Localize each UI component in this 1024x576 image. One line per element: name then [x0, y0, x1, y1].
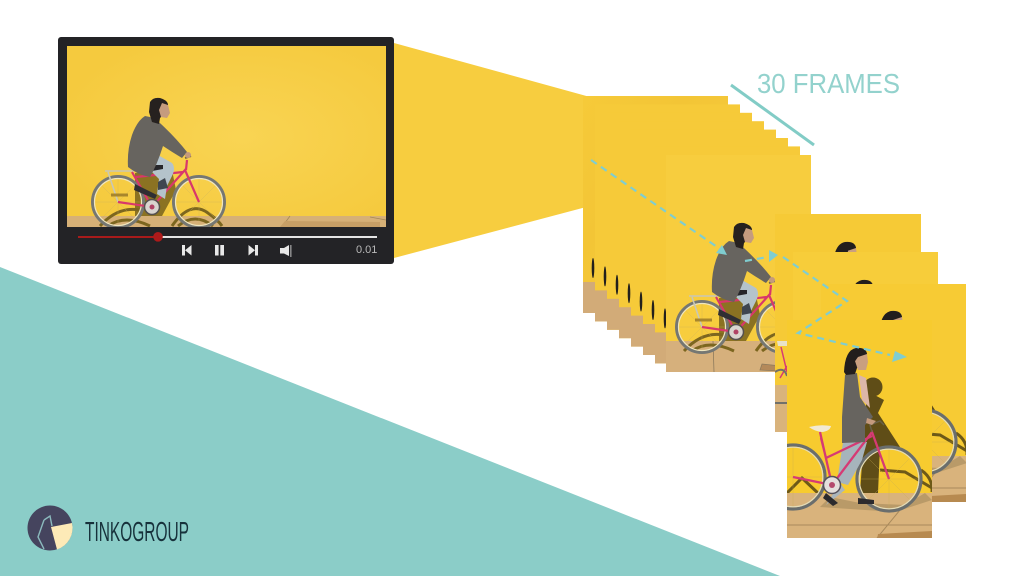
extracted frame C: [850, 284, 966, 502]
arrow to frame stack: [745, 250, 778, 262]
video player: [58, 37, 394, 264]
frame 7: [655, 146, 800, 363]
icon: next: [248, 245, 258, 256]
final arrowhead: [892, 351, 907, 362]
extracted frame B: [833, 252, 938, 284]
label: 30 frames: [731, 68, 900, 145]
zigzag dashed path: [783, 257, 890, 355]
frame 6: [643, 138, 788, 355]
frame 8: front frame with cyclist: [666, 155, 811, 372]
frame 4: [619, 121, 764, 338]
stack of 30 frames: [583, 96, 811, 372]
extracted frame D: front, woman walking bike: [787, 320, 932, 538]
background teal triangle: [0, 267, 780, 576]
icon: pause: [215, 245, 224, 256]
logo wordmark: TINKOGROUP: [85, 516, 189, 547]
playback controls: [182, 245, 291, 257]
player body: [58, 37, 394, 264]
icon: previous: [182, 245, 192, 256]
extracted frame A: [775, 214, 921, 432]
frame 5: [631, 130, 776, 347]
time label: 0.01: [356, 244, 377, 256]
funnel projection from player to frames: [394, 43, 590, 258]
frame 2: [595, 104, 740, 321]
frame 3: [607, 113, 752, 330]
icon: volume: [280, 245, 291, 257]
30 frames bracket line: [731, 85, 814, 145]
logo: Tinkogroup: [28, 506, 189, 550]
video frame: cyclist on yellow wall: [67, 46, 386, 227]
dashed arrows: frame flow: [591, 160, 907, 362]
icon: lamp logo mark: [28, 506, 73, 550]
frame 1: [583, 96, 728, 313]
progress bar: [78, 232, 377, 242]
arrow to cyclist: [591, 160, 727, 255]
30 frames text: 30 FRAMES: [757, 68, 900, 99]
